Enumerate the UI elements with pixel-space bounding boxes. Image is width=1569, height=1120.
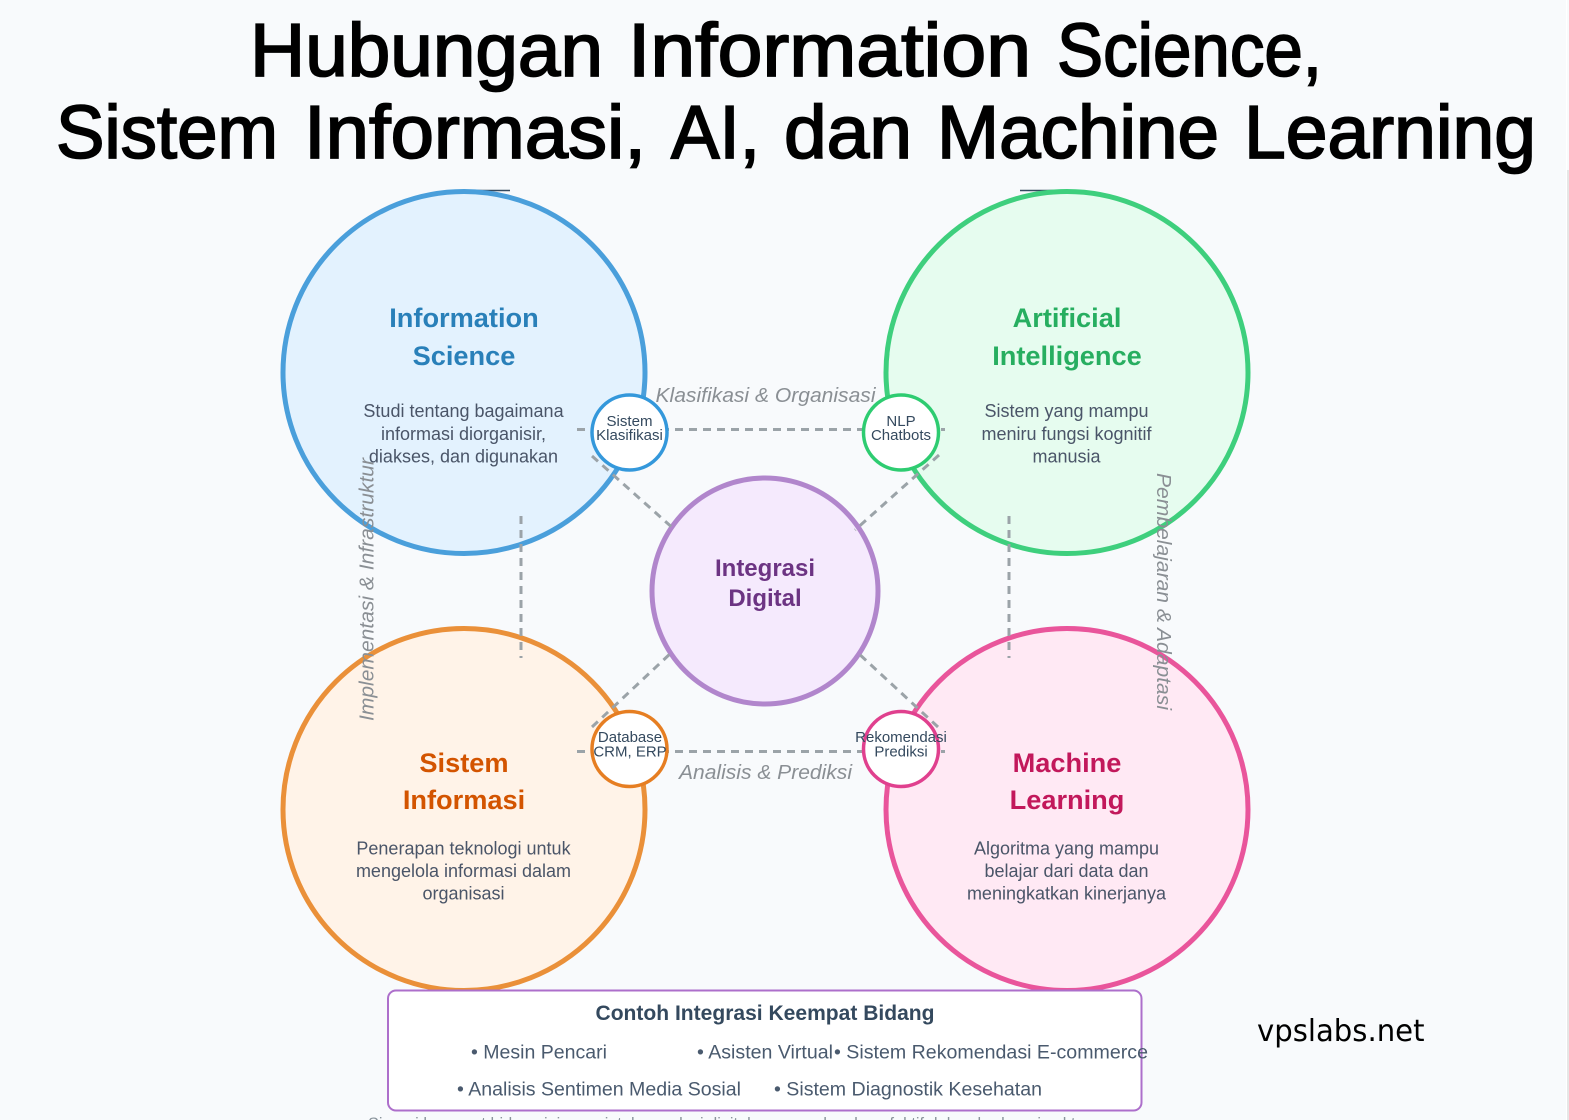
node: Rekomendasi Prediksi (855, 712, 947, 786)
panel: contoh integrasi: • Sistem Diagnostik Kesehatan (774, 1080, 1042, 1100)
circle: Machine Learning: belajar dari data dan (984, 861, 1149, 881)
relation label: Implementasi & Infrastruktur: Implementasi & Infrastruktur (356, 457, 378, 721)
panel: contoh integrasi: Contoh Integrasi Keempat Bidang (596, 1002, 934, 1025)
relation label: Klasifikasi & Organisasi: Klasifikasi & Organisasi (656, 385, 876, 407)
circle: Sistem Informasi: organisasi (422, 884, 505, 904)
relation label: Pembelajaran & Adaptasi: Pembelajaran & Adaptasi (1152, 473, 1174, 711)
node: Database CRM, ERP (592, 712, 667, 786)
circle: Machine Learning: Machine (1013, 747, 1121, 778)
title: Learning (1244, 90, 1536, 174)
circle: Sistem Informasi (283, 628, 645, 990)
circle: Information Science: diakses, dan digunakan (369, 446, 558, 466)
title: Hubungan (250, 8, 603, 92)
panel: contoh integrasi: • Sistem Rekomendasi E-commerce (834, 1042, 1148, 1064)
title: Informasi, (304, 90, 646, 174)
node: Database CRM, ERP: Database (598, 729, 662, 746)
node: Rekomendasi Prediksi: Rekomendasi (855, 729, 947, 746)
node: Database CRM, ERP: CRM, ERP (593, 744, 667, 760)
watermark: vpslabs.net (1257, 1014, 1425, 1049)
node: Sistem Klasifikasi: Klasifikasi (596, 427, 663, 444)
circle: Integrasi Digital: Digital (728, 585, 802, 612)
panel: contoh integrasi: • Mesin Pencari (471, 1042, 607, 1064)
circle: Information Science (283, 190, 645, 554)
circle: Information Science: Information (389, 302, 539, 333)
circle: Integrasi Digital: Integrasi (715, 555, 815, 582)
circle: Sistem Informasi: Informasi (403, 784, 525, 815)
panel: contoh integrasi (388, 990, 1148, 1110)
title: Information (628, 8, 1031, 92)
node: Sistem Klasifikasi: Sistem (606, 413, 652, 430)
circle: Machine Learning (886, 628, 1248, 990)
circle: Sistem Informasi: Sistem (419, 747, 509, 778)
title: Science, (1057, 8, 1322, 92)
circle: Artificial Intelligence: Sistem yang mampu (984, 401, 1149, 421)
circle: Sistem Informasi: mengelola informasi dalam (356, 861, 571, 881)
node: Rekomendasi Prediksi: Prediksi (874, 744, 928, 760)
relation label: Analisis & Prediksi: Analisis & Prediksi (678, 762, 853, 784)
panel: contoh integrasi: • Analisis Sentimen Media Sosial (457, 1080, 741, 1100)
circle: Artificial Intelligence (886, 190, 1248, 554)
circle: Artificial Intelligence: meniru fungsi kognitif (981, 424, 1153, 444)
circle: Machine Learning: meningkatkan kinerjanya (967, 884, 1167, 904)
circle: Machine Learning: Learning (1010, 784, 1124, 815)
panel: contoh integrasi: • Asisten Virtual (697, 1042, 833, 1064)
title: AI, (671, 90, 760, 174)
node: Sistem Klasifikasi (592, 395, 667, 470)
circle: Artificial Intelligence: Intelligence (992, 340, 1142, 371)
title (56, 8, 1536, 174)
circle: Information Science: Studi tentang bagaimana (363, 401, 565, 421)
dashed connectors (521, 430, 1009, 752)
circle: Information Science: informasi diorganisir, (381, 424, 546, 444)
node: NLP Chatbots: NLP (886, 413, 916, 430)
circle: Artificial Intelligence: manusia (1032, 446, 1102, 466)
title: Machine (937, 90, 1219, 174)
circle: Sistem Informasi: Penerapan teknologi untuk (356, 838, 572, 858)
title: dan (784, 90, 912, 174)
circle: Artificial Intelligence: Artificial (1013, 302, 1121, 333)
node: NLP Chatbots: Chatbots (871, 427, 931, 444)
circle: Machine Learning: Algoritma yang mampu (974, 838, 1159, 858)
title: Sistem (56, 90, 278, 174)
circle: Information Science: Science (413, 340, 515, 371)
circle: Integrasi Digital (652, 478, 878, 704)
node: NLP Chatbots (864, 395, 938, 470)
